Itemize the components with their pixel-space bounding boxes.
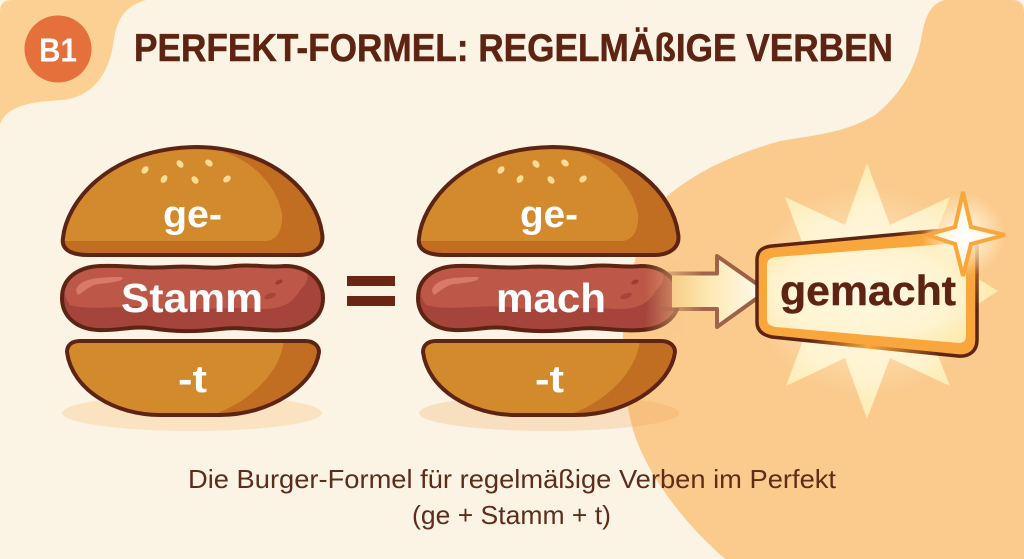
- patty: [62, 262, 323, 331]
- label: ge-: ge-: [163, 194, 222, 236]
- starburst behind result: [740, 163, 998, 419]
- background blob: right: [623, 0, 1024, 559]
- arrow: [660, 256, 767, 327]
- label: Stamm: Stamm: [121, 275, 263, 321]
- fade on patty end: [645, 262, 684, 334]
- corner blob: top left: [0, 0, 146, 124]
- sparkle star: [921, 192, 1005, 277]
- burger: formula: [55, 140, 323, 431]
- shadow under burger: [62, 395, 322, 431]
- label: -t: -t: [178, 359, 207, 401]
- level badge: B1: [24, 16, 92, 82]
- label: -t: -t: [535, 359, 564, 401]
- bottom bun: [416, 335, 675, 420]
- result card: [757, 229, 977, 356]
- label: mach: mach: [496, 275, 606, 321]
- label: ge-: ge-: [520, 194, 578, 236]
- caption: (ge + Stamm + t): [412, 500, 611, 530]
- caption: [188, 464, 837, 530]
- top bun: [55, 140, 322, 255]
- top bun: [411, 140, 678, 255]
- caption: Die Burger-Formel für regelmäßige Verben im Perfekt: [188, 464, 837, 494]
- burger: example: [411, 140, 684, 431]
- result word: gemacht: [780, 267, 956, 314]
- patty: [418, 262, 679, 331]
- title: PERFEKT-FORMEL: REGELMÄßIGE VERBEN: [134, 27, 893, 70]
- shadow under burger: [419, 395, 679, 431]
- equals sign: [347, 276, 395, 306]
- level badge: B1: B1: [39, 32, 77, 68]
- bottom bun: [60, 335, 319, 420]
